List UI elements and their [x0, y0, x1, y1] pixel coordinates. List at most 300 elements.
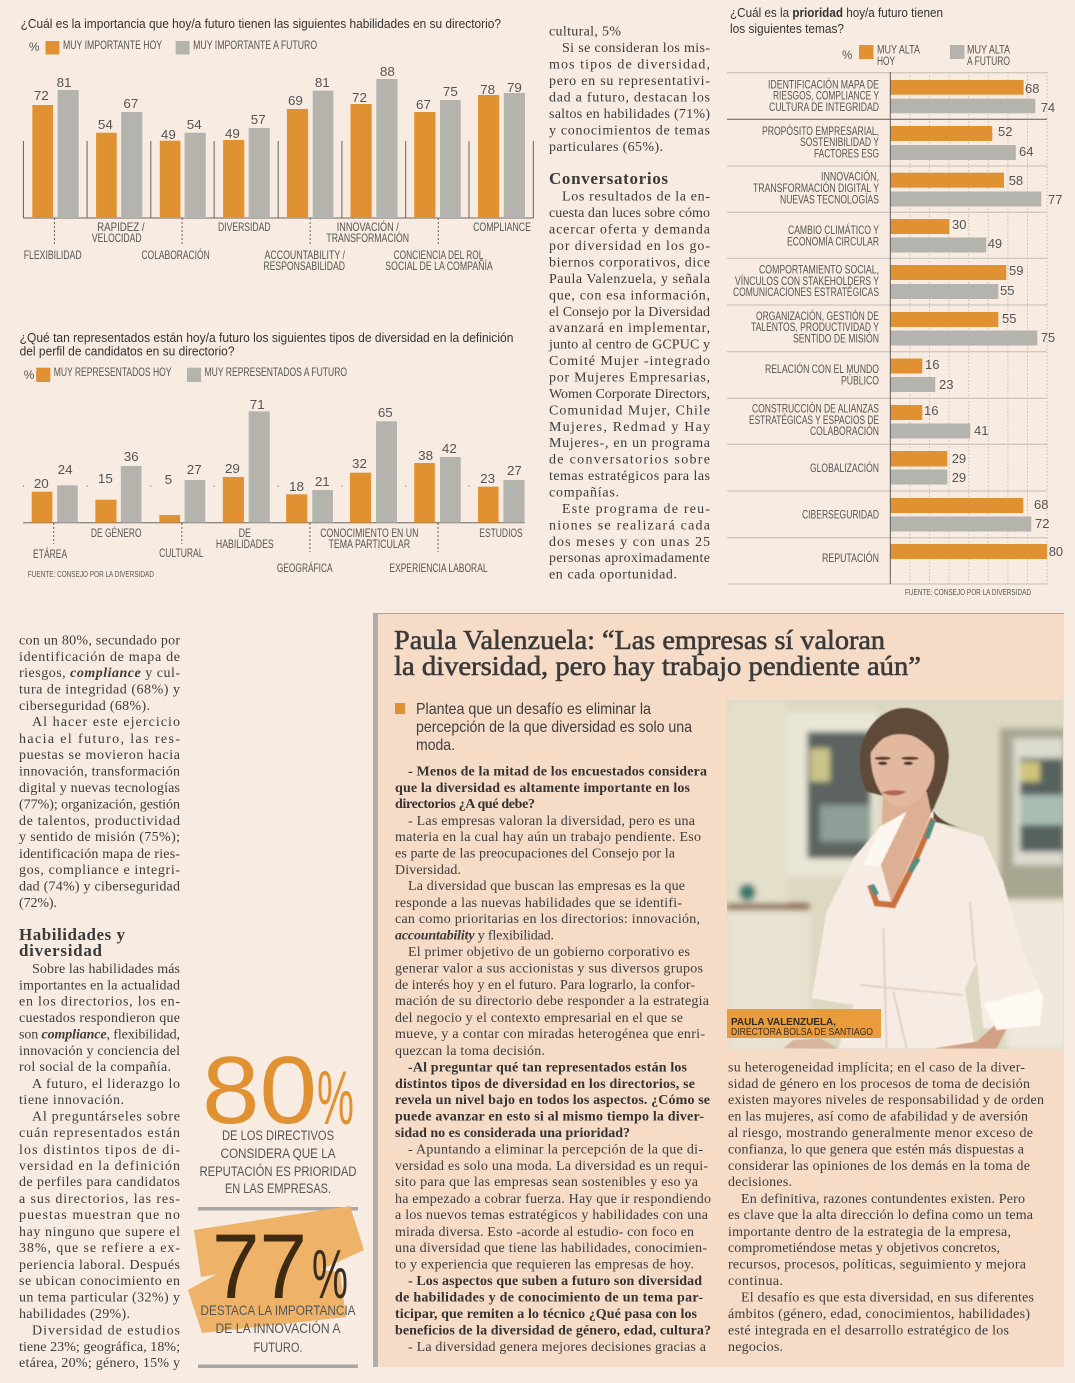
- text column: bottom left: de talentos, productividad: [19, 814, 180, 829]
- interview headline: la diversidad, pero hay trabajo pendiente aún”: [394, 650, 921, 681]
- interview text column 1: materia en la cual hay aún un trabajo pendiente. Eso: [395, 830, 701, 845]
- category labels: TEMA PARTICULAR: [328, 538, 410, 551]
- row labels: INNOVACIÓN,: [821, 170, 879, 184]
- interview text column 2: El desafío es que esta diversidad, en sus diferentes: [741, 1290, 1034, 1306]
- row labels: CONSTRUCCIÓN DE ALIANZAS: [752, 402, 879, 416]
- text column: bottom left: puestas muestran que no: [19, 1208, 180, 1223]
- bar values: 29: [225, 461, 240, 476]
- interview headline: [394, 624, 921, 681]
- bars: a futuro: [890, 99, 1041, 531]
- text column: top middle: Mujeres, Redmad y Hay: [549, 420, 710, 435]
- interview text column 1: mación de su directorio debe responder a la estrategia: [395, 994, 710, 1009]
- grid: [727, 72, 1047, 584]
- chart title: [20, 330, 513, 358]
- text column: bottom left: [19, 634, 181, 1371]
- bar values: 59: [1009, 263, 1023, 278]
- bar values: 64: [1019, 144, 1033, 159]
- bars: a futuro: [58, 79, 525, 218]
- text column: top middle: personas aproximadamente: [549, 551, 710, 566]
- caption: [200, 1128, 357, 1196]
- interview text column 2: considerar las opiniones de los demás en la toma de: [728, 1159, 1030, 1174]
- chart title: del perfil de candidatos en su directorio?: [20, 344, 234, 358]
- interview text column 2: confianza, lo que genera que estén más dispuestas a: [728, 1142, 1025, 1158]
- row labels: COMUNICACIONES ESTRATÉGICAS: [733, 286, 879, 299]
- text column: top middle: cuesta dan luces sobre cómo: [549, 206, 710, 221]
- bar values: 88: [380, 64, 395, 79]
- chart title: ¿Cuál es la prioridad hoy/a futuro tienen: [730, 5, 943, 20]
- interview text column 1: del negocio y el contexto empresarial en el que se: [395, 1011, 683, 1026]
- legend: HOY: [877, 56, 895, 68]
- category labels: DE: [239, 527, 251, 540]
- hair back: [860, 708, 970, 830]
- vertical axis: [889, 72, 891, 584]
- row labels: REPUTACIÓN: [822, 552, 879, 565]
- text column: bottom left: 38%, que se refiere a ex-: [19, 1241, 180, 1256]
- text column: top middle: Los resultados de la en-: [562, 190, 710, 204]
- lead text: Plantea que un desafío es eliminar la: [416, 701, 651, 718]
- interview text column 1: mirada diversa. Esto -acorde al estudio- con foco en: [395, 1225, 694, 1240]
- row labels: TALENTOS, PRODUCTIVIDAD Y: [751, 322, 879, 334]
- caption: [200, 1303, 356, 1355]
- text column: top middle: saltos en habilidades (71%): [549, 107, 710, 122]
- interview text column 1: a los nuevos temas estratégicos y habilidades con una: [395, 1208, 709, 1223]
- necklace: [870, 818, 933, 905]
- text column: bottom left: tiene innovación.: [19, 1093, 124, 1108]
- bar values: 68: [1034, 497, 1048, 512]
- text column: bottom left: a sus directorios, las res-: [19, 1192, 180, 1207]
- cuff: [983, 990, 1043, 1030]
- bar values: 23: [480, 471, 495, 486]
- row labels: ORGANIZACIÓN, GESTIÓN DE: [756, 310, 879, 323]
- bar values: 29: [952, 470, 966, 485]
- bar values: 52: [998, 124, 1012, 139]
- text column: bottom left: y sentido de misión (75%);: [19, 830, 180, 845]
- text column: bottom left: Al preguntárseles sobre: [32, 1110, 180, 1124]
- category labels: ESTUDIOS: [479, 527, 523, 540]
- row labels: COLABORACIÓN: [810, 425, 879, 438]
- text column: bottom left: en los directorios, los en-: [19, 994, 180, 1010]
- caption: DESTACA LA IMPORTANCIA: [200, 1303, 356, 1318]
- blurred room background: [727, 702, 1067, 1052]
- category labels: SOCIAL DE LA COMPAÑÍA: [385, 260, 493, 273]
- bar values: 72: [352, 90, 367, 105]
- text column: bottom left: habilidades (29%).: [19, 1307, 130, 1322]
- bar values: 81: [57, 75, 72, 90]
- text column: bottom left: dad (74%) y ciberseguridad: [19, 880, 180, 894]
- row labels: CAMBIO CLIMÁTICO Y: [788, 224, 879, 237]
- bars: hoy: [890, 80, 1047, 559]
- category labels: [33, 527, 523, 575]
- category labels: COLABORACIÓN: [142, 249, 210, 262]
- interview text column 1: La diversidad que buscan las empresas es la que: [408, 879, 685, 894]
- big number 80: 80: [202, 1037, 317, 1144]
- legend: MUY REPRESENTADOS A FUTURO: [205, 366, 347, 379]
- interview text column 1: Diversidad.: [395, 863, 461, 878]
- text column: top middle: por diversidad en los go-: [549, 239, 710, 254]
- legend: [24, 366, 347, 382]
- bar values: 27: [187, 462, 202, 477]
- legend: MUY IMPORTANTE HOY: [63, 39, 162, 52]
- category labels: TRANSFORMACIÓN: [326, 232, 409, 245]
- text column: bottom left: periencia laboral. Después: [19, 1258, 180, 1273]
- category labels: INNOVACIÓN /: [337, 221, 399, 234]
- interview text column 2: [728, 1060, 1044, 1355]
- percent sign: %: [312, 1235, 348, 1313]
- collar: [864, 808, 934, 866]
- category labels: CONOCIMIENTO EN UN: [320, 527, 418, 540]
- bar values: 49: [161, 127, 176, 142]
- text column: bottom left: ciberseguridad (68%).: [19, 699, 150, 714]
- bar values: 71: [250, 397, 265, 412]
- bar values: 27: [507, 463, 522, 478]
- bars: a futuro: [57, 411, 525, 523]
- lead bullet: [395, 703, 405, 714]
- text column: bottom left: hay ninguno que supere el: [19, 1225, 180, 1240]
- interview text column 1: accountability y flexibilidad.: [395, 928, 554, 944]
- chart: tipos de diversidad: [20, 330, 525, 579]
- bar values: [34, 397, 522, 494]
- right hand: [933, 1023, 1007, 1048]
- bar values: 74: [1041, 100, 1055, 115]
- interview text column 1: [395, 764, 711, 1355]
- caption: REPUTACIÓN ES PRIORIDAD: [200, 1164, 357, 1179]
- caption: DE LOS DIRECTIVOS: [222, 1128, 334, 1143]
- bar values: 55: [1002, 311, 1016, 326]
- interview text column 1: - Las empresas valoran la diversidad, pero es una: [408, 814, 696, 829]
- photo caption: [727, 1009, 881, 1038]
- interview text column 1: de interés hoy y en el futuro. Para lograrlo, la confor-: [395, 978, 695, 993]
- text column: bottom left: innovación, transformación: [19, 764, 180, 780]
- bar values: 79: [507, 80, 522, 95]
- bar values: [34, 64, 522, 142]
- callout: 77%: [188, 1206, 364, 1355]
- legend: MUY IMPORTANTE A FUTURO: [193, 39, 317, 52]
- category labels: VELOCIDAD: [92, 232, 142, 245]
- row labels: GLOBALIZACIÓN: [810, 462, 879, 475]
- row labels: [733, 78, 879, 565]
- left hand: [783, 1038, 838, 1048]
- interview text column 2: existen mayores niveles de responsabilidad y de orden: [728, 1093, 1044, 1108]
- text column: bottom left: tiene 23%; geográfica, 18%;: [19, 1340, 180, 1355]
- heading: habilidades y diversidad: diversidad: [19, 941, 103, 960]
- text column: bottom left: cuestados respondieron que: [19, 1011, 180, 1026]
- text column: bottom left: versidad en la definición: [19, 1159, 180, 1174]
- text column: bottom left: Al hacer este ejercicio: [32, 715, 180, 730]
- category labels: ACCOUNTABILITY /: [264, 249, 346, 262]
- row labels: NUEVAS TECNOLOGÍAS: [780, 194, 879, 206]
- interview text column 1: - Los aspectos que suben a futuro son diversidad: [408, 1274, 702, 1289]
- text column: top middle: Comité Mujer -integrado: [549, 354, 710, 369]
- big number 77: 77: [212, 1216, 307, 1318]
- row labels: CIBERSEGURIDAD: [802, 510, 879, 522]
- text column: top middle: Comunidad Mujer, Chile: [549, 404, 710, 418]
- bar values: 77: [1048, 192, 1062, 207]
- interview headline: Paula Valenzuela: “Las empresas sí valoran: [394, 624, 885, 655]
- bar values: 75: [443, 84, 458, 99]
- interview text column 2: En definitiva, razones contundentes existen. Pero: [741, 1192, 1025, 1207]
- interview text column 2: continua.: [728, 1274, 783, 1289]
- text column: bottom left: identificación mapa de ries-: [19, 847, 180, 862]
- interview text column 1: mueve, y a contar con miradas heterogénea que enri-: [395, 1027, 705, 1042]
- row labels: TRANSFORMACIÓN DIGITAL Y: [753, 182, 879, 195]
- interview text column 2: esté integrada en el desarrollo estratégico de los: [728, 1324, 1009, 1338]
- category labels: [24, 221, 531, 273]
- bar values: 36: [124, 449, 139, 464]
- interview text column 1: El primer objetivo de un gobierno corporativo es: [408, 945, 690, 960]
- legend: %: [24, 369, 34, 382]
- text column: top middle: dad a futuro, destacan los: [549, 90, 710, 106]
- category labels: RAPIDEZ /: [97, 221, 145, 234]
- category labels: ETÁREA: [33, 548, 67, 561]
- interview text column 1: ticipar, que remiten a lo técnico ¿Qué pasa con los: [395, 1307, 698, 1322]
- bar values: 29: [952, 451, 966, 466]
- caption: FUTURO.: [254, 1340, 302, 1355]
- bar values: 16: [925, 357, 939, 372]
- face: [871, 734, 934, 808]
- bar values: 67: [416, 97, 431, 112]
- text column: bottom left: (77%); organización, gestión: [19, 798, 180, 812]
- bar values: 54: [98, 117, 113, 132]
- chart title: [730, 5, 943, 36]
- legend: MUY ALTA: [967, 44, 1010, 56]
- text column: top middle: particulares (65%).: [549, 140, 663, 155]
- bar values: 16: [924, 403, 938, 418]
- bar values: 69: [288, 93, 303, 108]
- text column: top middle: acercar oferta y demanda: [549, 222, 711, 238]
- bar values: 78: [480, 82, 495, 97]
- interview text column 1: - Menos de la mitad de los encuestados considera: [408, 764, 707, 780]
- category labels: RESPONSABILIDAD: [263, 260, 345, 273]
- legend: [842, 44, 1010, 68]
- row labels: FACTORES ESG: [814, 148, 879, 160]
- interview text column 1: puede avanzar en esto si al mismo tiempo la diver-: [395, 1110, 704, 1124]
- text column: bottom left: son compliance, flexibilidad,: [19, 1028, 180, 1042]
- bar values: 54: [187, 117, 202, 132]
- neck and chest: [880, 792, 932, 903]
- text column: bottom left: digital y nuevas tecnologías: [19, 781, 180, 796]
- interview text column 1: sito para que las empresas sean sostenibles y eso ya: [395, 1175, 699, 1190]
- chart title: ¿Qué tan representados están hoy/a futuro los siguientes tipos de diversidad en la definición: [20, 330, 513, 345]
- interview text column 1: es parte de las preocupaciones del Consejo por la: [395, 846, 676, 862]
- source note: FUENTE: CONSEJO POR LA DIVERSIDAD: [28, 569, 154, 579]
- chart: prioridad de temas: [727, 5, 1063, 597]
- interview text column 1: sidad no es considerada una prioridad?: [395, 1126, 630, 1141]
- bar values: 57: [251, 112, 266, 127]
- shirt: [812, 808, 1043, 1048]
- bar values: 20: [34, 476, 49, 491]
- bar values: 21: [315, 474, 330, 489]
- interview text column 1: directorios ¿A qué debe?: [395, 797, 535, 812]
- bar values: 81: [315, 75, 330, 90]
- text column: bottom left: puestas se movieron hacia: [19, 748, 181, 763]
- interview text column 1: versidad es solo una moda. La diversidad es un requi-: [395, 1159, 708, 1174]
- text column: bottom left: cuán representados están: [19, 1126, 180, 1141]
- bar values: 15: [98, 471, 113, 486]
- category labels: EXPERIENCIA LABORAL: [389, 562, 488, 575]
- interview text column 2: sidad de género en los procesos de toma de decisión: [728, 1077, 1030, 1092]
- row labels: PÚBLICO: [841, 374, 879, 388]
- bar values: 18: [289, 479, 304, 494]
- interview text column 1: can como prioritarias en los directorios: innovación,: [395, 912, 700, 927]
- portrait photo: [727, 700, 1067, 1052]
- row labels: VÍNCULOS CON STAKEHOLDERS Y: [735, 275, 879, 288]
- axis and ticks: [23, 141, 534, 245]
- text column: top middle: Paula Valenzuela, y señala: [549, 272, 711, 287]
- bar values: 23: [939, 377, 953, 392]
- photo caption: PAULA VALENZUELA,: [731, 1016, 836, 1028]
- interview text column 1: distintos tipos de diversidad en los directorios, se: [395, 1077, 695, 1092]
- text column: bottom left: A futuro, el liderazgo lo: [32, 1077, 180, 1092]
- text column: top middle: temas estratégicos para las: [549, 469, 710, 484]
- text column: top middle: pero en su representativi-: [549, 74, 710, 89]
- text column: top middle: de conversatorios sobre: [549, 452, 710, 468]
- panel background: [373, 613, 1064, 1367]
- lead text: [416, 701, 692, 754]
- source note: FUENTE: CONSEJO POR LA DIVERSIDAD: [905, 587, 1031, 597]
- interview text column 1: que la diversidad es altamente importante en los: [395, 781, 691, 796]
- orange brush shape: [188, 1206, 364, 1333]
- interview text column 2: es clave que la alta dirección lo defina como un tema: [728, 1208, 1034, 1223]
- interview text column 2: recursos, procesos, políticas, seguimiento y mejora: [728, 1258, 1027, 1272]
- bar values: 42: [442, 441, 457, 456]
- text column: top middle: biernos corporativos, dice: [549, 256, 710, 270]
- bars: hoy: [32, 463, 499, 523]
- text column: bottom left: innovación y conciencia del: [19, 1044, 180, 1059]
- interview text column 1: de habilidades y de conocimiento de un tema par-: [395, 1290, 703, 1306]
- text column: bottom left: Sobre las habilidades más: [32, 962, 180, 977]
- lead text: moda.: [416, 737, 455, 754]
- text column: top middle: avanzará en implementar,: [549, 321, 710, 336]
- interview text column 1: - La diversidad genera mejores decisiones gracias a: [408, 1340, 707, 1355]
- text column: bottom left: (72%).: [19, 896, 57, 911]
- row labels: SENTIDO DE MISIÓN: [793, 332, 879, 346]
- bar values: 67: [123, 96, 138, 111]
- text column: top middle: y conocimientos de temas: [549, 124, 710, 138]
- row labels: RELACIÓN CON EL MUNDO: [765, 363, 879, 376]
- bar values: 65: [378, 405, 393, 420]
- bars: hoy: [32, 95, 499, 218]
- bar values: 75: [1041, 330, 1055, 345]
- row labels: PROPÓSITO EMPRESARIAL,: [762, 125, 879, 138]
- interview text column 1: responde a las nuevas habilidades que se identifi-: [395, 896, 682, 911]
- heading: habilidades y diversidad: [19, 925, 126, 960]
- category labels: GEOGRÁFICA: [277, 562, 333, 575]
- divider: [198, 1207, 358, 1210]
- bar values: 49: [988, 236, 1002, 251]
- category labels: DE GÉNERO: [91, 527, 142, 540]
- bar values: 5: [165, 472, 172, 487]
- category labels: HABILIDADES: [216, 538, 274, 551]
- text column: top middle: compañías.: [549, 486, 619, 500]
- text column: top middle: el Consejo por la Diversidad: [549, 305, 710, 320]
- legend: MUY ALTA: [877, 44, 920, 56]
- row labels: CULTURA DE INTEGRIDAD: [769, 102, 879, 114]
- text column: bottom left: riesgos, compliance y cul-: [19, 666, 180, 681]
- interview text column 2: comprometiéndose metas y objetivos concretos,: [728, 1241, 1000, 1256]
- interview text column 1: to y experiencia que requieren las empresas de hoy.: [395, 1258, 694, 1272]
- axis and ticks: [23, 486, 525, 552]
- category labels: CULTURAL: [159, 547, 204, 560]
- legend: %: [842, 50, 852, 62]
- interview text column 1: una diversidad que tiene las habilidades, conocimien-: [395, 1241, 707, 1256]
- text column: top middle: niones se realizará cada: [549, 518, 711, 534]
- text column: bottom left: importantes en la actualidad: [19, 978, 180, 994]
- text column: top middle: en cada oportunidad.: [549, 568, 677, 582]
- chart: importancia de habilidades: [21, 16, 534, 273]
- category labels: COMPLIANCE: [473, 221, 531, 234]
- interview text column 2: ámbitos (género, edad, conocimientos, habilidades): [728, 1307, 1030, 1322]
- text column: bottom left: etárea, 20%; género, 15% y: [19, 1356, 180, 1371]
- interview text column 1: generar valor a sus accionistas y sus diversos grupos: [395, 962, 703, 976]
- heading: conversatorios: Conversatorios: [549, 169, 668, 188]
- bar values: 72: [1035, 516, 1049, 531]
- row labels: ESTRATÉGICAS Y ESPACIOS DE: [749, 414, 879, 427]
- legend: MUY REPRESENTADOS HOY: [54, 366, 172, 379]
- legend: A FUTURO: [967, 56, 1010, 68]
- text column: bottom left: hacia el futuro, las res-: [19, 732, 180, 747]
- text column: bottom left: gos, compliance e integri-: [19, 863, 180, 878]
- text column: bottom left: con un 80%, secundado por: [19, 634, 180, 648]
- divider: [198, 1364, 358, 1368]
- interview text column 2: su heterogeneidad implícita; en el caso de la diver-: [728, 1060, 1025, 1076]
- text column: bottom left: identificación de mapa de: [19, 650, 180, 665]
- bar values: 30: [952, 217, 966, 232]
- category labels: DIVERSIDAD: [218, 221, 271, 234]
- category labels: FLEXIBILIDAD: [24, 249, 82, 262]
- interview text column 1: ha empezado a cobrar fuerza. Hay que ir respondiendo: [395, 1192, 711, 1207]
- caption: EN LAS EMPRESAS.: [225, 1181, 331, 1196]
- legend: %: [29, 41, 39, 54]
- category labels: CONCIENCIA DEL ROL: [394, 249, 484, 262]
- text column: top middle: que, con esa información,: [549, 288, 710, 304]
- lead text: percepción de la que diversidad es solo una: [416, 719, 692, 736]
- percent sign: %: [317, 1056, 354, 1141]
- text column: bottom left: un tema particular (32%) y: [19, 1290, 180, 1306]
- row labels: RIESGOS, COMPLIANCE Y: [773, 90, 879, 102]
- photo caption: DIRECTORA BOLSA DE SANTIAGO: [731, 1026, 873, 1038]
- interview text column 1: - Apuntando a eliminar la percepción de la que di-: [408, 1142, 703, 1158]
- chart title: ¿Cuál es la importancia que hoy/a futuro tienen las siguientes habilidades en su directorio?: [21, 16, 501, 31]
- interview text column 1: revela un nivel bajo en todos los aspectos. ¿Cómo se: [395, 1093, 710, 1108]
- callout: 80%: [200, 1037, 357, 1196]
- text column: top middle: [548, 24, 711, 582]
- interview text column 1: beneficios de la diversidad de género, edad, cultura?: [395, 1324, 711, 1338]
- row labels: SOSTENIBILIDAD Y: [800, 137, 879, 149]
- text column: top middle: Si se consideran los mis-: [562, 41, 710, 56]
- text column: bottom left: se ubican conocimiento en: [19, 1274, 180, 1289]
- text column: top middle: por Mujeres Empresarias,: [549, 370, 710, 386]
- text column: top middle: Mujeres-, en un programa: [549, 436, 711, 451]
- panel: entrevista: [373, 613, 1067, 1367]
- caption: CONSIDERA QUE LA: [220, 1146, 336, 1161]
- interview text column 1: quezcan la toma decisión.: [395, 1044, 545, 1059]
- text column: bottom left: de perfiles para candidatos: [19, 1175, 180, 1190]
- bar values: 32: [352, 456, 367, 471]
- interview text column 2: en las mujeres, así como de afabilidad y de aversión: [728, 1110, 1028, 1124]
- text column: top middle: cultural, 5%: [549, 24, 621, 40]
- heading: habilidades y diversidad: Habilidades y: [19, 925, 126, 944]
- bar values: 58: [1009, 173, 1023, 188]
- bar values: 38: [418, 448, 433, 463]
- bar values: 68: [1025, 81, 1039, 96]
- woman: [783, 708, 1043, 1048]
- text column: bottom left: tura de integridad (68%) y: [19, 682, 180, 698]
- interview text column 2: decisiones.: [728, 1175, 792, 1190]
- interview text column 2: al riesgo, mostrando generalmente menor exceso de: [728, 1126, 1033, 1141]
- bar values: 72: [34, 88, 49, 103]
- text column: bottom left: rol social de la compañía.: [19, 1060, 171, 1075]
- chart title: los siguientes temas?: [730, 21, 844, 36]
